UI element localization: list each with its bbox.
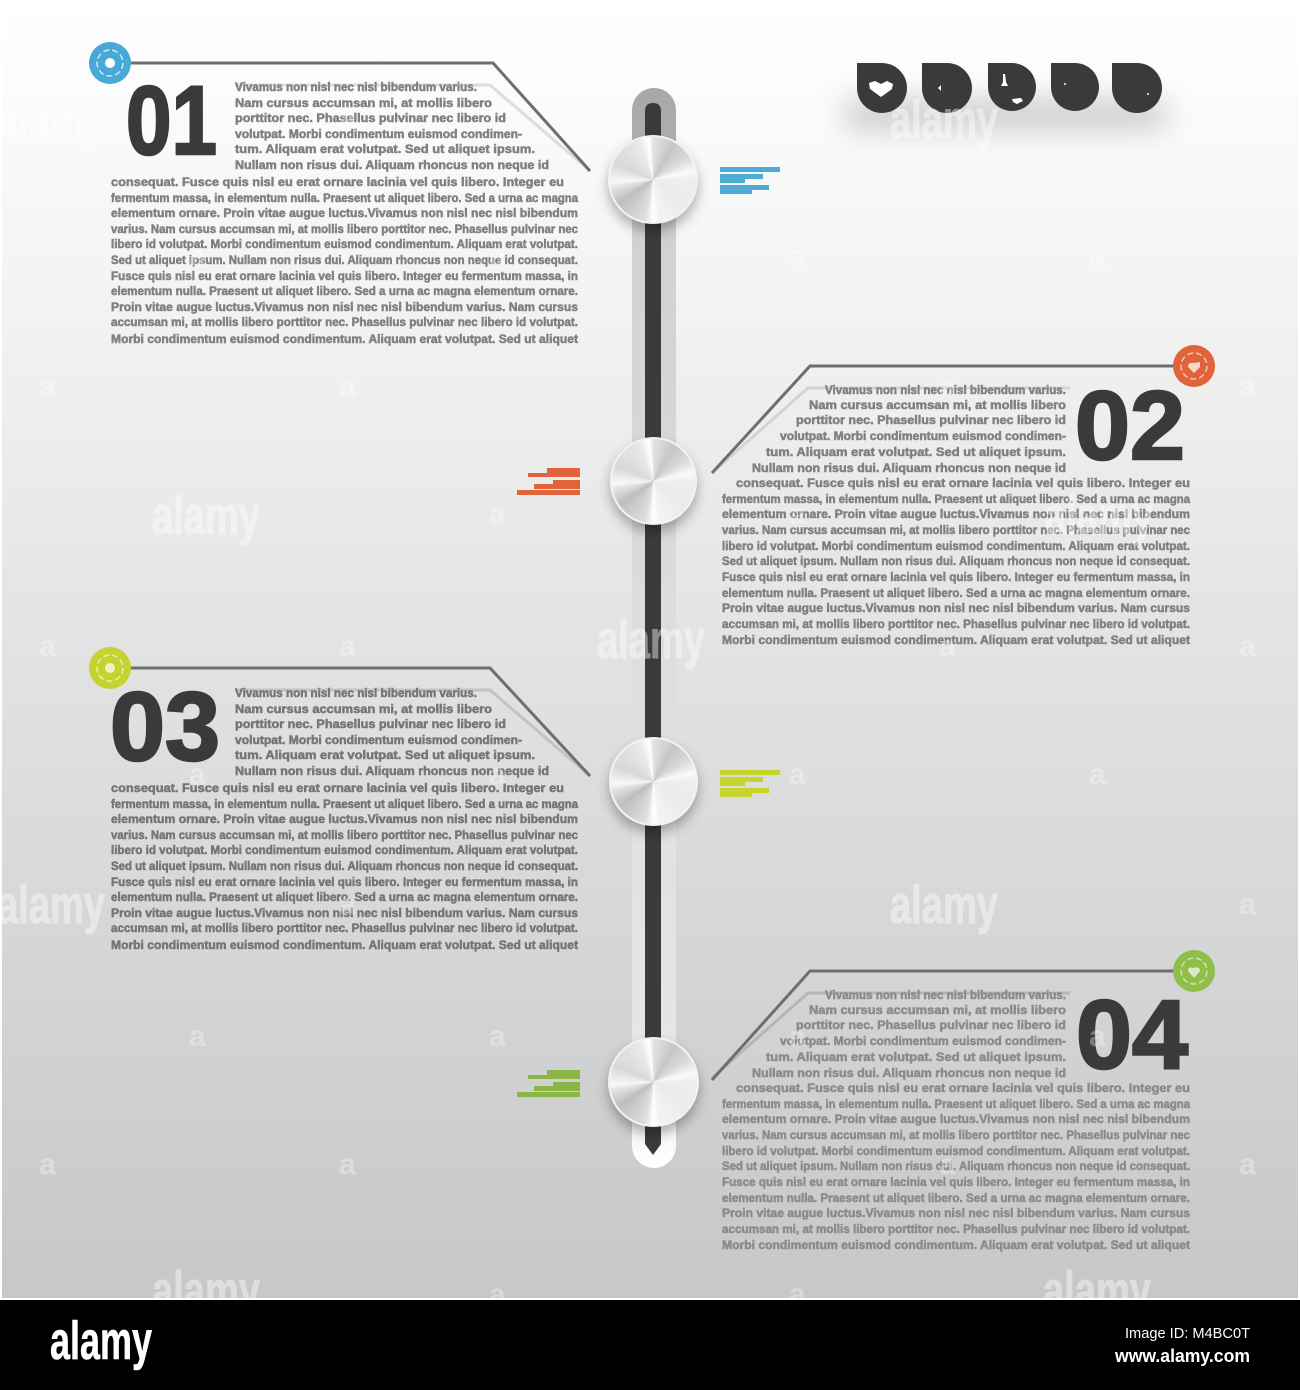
text block 04: tum. Aliquam erat volutpat. Sed ut aliquet ipsum. — [766, 1050, 1066, 1064]
knob 4 — [608, 1037, 699, 1127]
watermarks: a — [939, 370, 956, 403]
watermarks: a — [39, 630, 56, 663]
watermarks: a — [39, 1148, 56, 1181]
watermarks: a — [1239, 370, 1256, 403]
watermarks: a — [189, 240, 206, 273]
watermarks: alamy — [0, 875, 105, 935]
text block 04: elementum nulla. Praesent ut aliquet libero. Sed a urna ac magna elementum ornare. — [722, 1191, 1190, 1205]
text block 01: Sed ut aliquet ipsum. Nullam non risus dui. Aliquam rhoncus non neque id consequat. — [111, 253, 578, 267]
knob 1 — [608, 135, 698, 224]
timeline track — [632, 88, 676, 1168]
text block 01: Fusce quis nisl eu erat ornare lacinia vel quis libero. Integer eu fermentum massa, in — [111, 269, 578, 283]
text block 03: accumsan mi, at mollis libero porttitor nec. Phasellus pulvinar nec libero id volutpat. — [111, 921, 578, 935]
text block 04: Fusce quis nisl eu erat ornare lacinia vel quis libero. Integer eu fermentum massa, in — [722, 1175, 1190, 1189]
text block 03: elementum nulla. Praesent ut aliquet libero. Sed a urna ac magna elementum ornare. — [111, 890, 578, 904]
text block 03: consequat. Fusce quis nisl eu erat ornare lacinia vel quis libero. Integer eu — [111, 781, 564, 795]
text block 01: Morbi condimentum euismod condimentum. Aliquam erat volutpat. Sed ut aliquet — [111, 332, 578, 346]
text block 01: consequat. Fusce quis nisl eu erat ornare lacinia vel quis libero. Integer eu — [111, 175, 564, 189]
watermarks: alamy — [0, 90, 105, 150]
text block 03: fermentum massa, in elementum nulla. Praesent ut aliquet libero. Sed a urna ac magna — [111, 797, 578, 811]
icon row — [845, 63, 1165, 128]
text block 02: libero id volutpat. Morbi condimentum euismod condimentum. Aliquam erat volutpat. — [722, 539, 1190, 553]
watermarks: a — [1239, 888, 1256, 921]
text block 03: Fusce quis nisl eu erat ornare lacinia vel quis libero. Integer eu fermentum massa, in — [111, 875, 578, 889]
watermarks: a — [789, 758, 806, 791]
text block 04: libero id volutpat. Morbi condimentum euismod condimentum. Aliquam erat volutpat. — [722, 1144, 1190, 1158]
text block 01: Proin vitae augue luctus.Vivamus non nisl nec nisl bibendum varius. Nam cursus — [111, 300, 578, 314]
text block 01: fermentum massa, in elementum nulla. Praesent ut aliquet libero. Sed a urna ac magna — [111, 191, 578, 205]
watermarks: alamy — [890, 90, 998, 150]
text block 01: Nullam non risus dui. Aliquam rhoncus non neque id — [235, 158, 549, 172]
icon: heart badge — [857, 63, 907, 113]
connector lines 01 — [130, 63, 590, 171]
text block 02: Fusce quis nisl eu erat ornare lacinia vel quis libero. Integer eu fermentum massa, in — [722, 570, 1190, 584]
footer logo: alamy — [50, 1311, 152, 1371]
text block 02: elementum nulla. Praesent ut aliquet libero. Sed a urna ac magna elementum ornare. — [722, 586, 1190, 600]
icon: badge 4 — [1051, 63, 1099, 111]
text block 01: accumsan mi, at mollis libero porttitor nec. Phasellus pulvinar nec libero id volutpat. — [111, 315, 578, 329]
text block 04: Nam cursus accumsan mi, at mollis libero — [809, 1003, 1066, 1017]
website: www.alamy.com — [1114, 1346, 1250, 1366]
watermarks: alamy — [1045, 486, 1153, 546]
text block 03: elementum ornare. Proin vitae augue luctus.Vivamus non nisl nec nisl bibendum — [111, 812, 578, 826]
text block 04: volutpat. Morbi condimentum euismod condimen- — [780, 1034, 1066, 1048]
watermarks: a — [339, 1148, 356, 1181]
text block 04: Proin vitae augue luctus.Vivamus non nisl nec nisl bibendum varius. Nam cursus — [722, 1206, 1190, 1220]
text block 04: Nullam non risus dui. Aliquam rhoncus non neque id — [752, 1066, 1066, 1080]
text block 02: accumsan mi, at mollis libero porttitor nec. Phasellus pulvinar nec libero id volutpat. — [722, 617, 1190, 631]
text block 01: Nam cursus accumsan mi, at mollis libero — [235, 96, 492, 110]
panel: step 04 — [517, 950, 1215, 1252]
watermarks: a — [789, 498, 806, 531]
bars: blue — [720, 167, 780, 194]
number 04: 04 — [1076, 980, 1188, 1089]
text block 04: Sed ut aliquet ipsum. Nullam non risus dui. Aliquam rhoncus non neque id consequat. — [722, 1159, 1190, 1173]
text block 03: volutpat. Morbi condimentum euismod condimen- — [235, 733, 522, 747]
text block 02: fermentum massa, in elementum nulla. Praesent ut aliquet libero. Sed a urna ac magna — [722, 492, 1190, 506]
watermarks: a — [339, 630, 356, 663]
watermarks: alamy — [152, 486, 260, 546]
watermarks: a — [189, 1020, 206, 1053]
text block 03: Proin vitae augue luctus.Vivamus non nisl nec nisl bibendum varius. Nam cursus — [111, 906, 578, 920]
watermarks: a — [789, 240, 806, 273]
text block 03: libero id volutpat. Morbi condimentum euismod condimentum. Aliquam erat volutpat. — [111, 843, 578, 857]
number 02: 02 — [1075, 371, 1185, 480]
text block 01: porttitor nec. Phasellus pulvinar nec libero id — [235, 111, 506, 125]
text block 03: Morbi condimentum euismod condimentum. Aliquam erat volutpat. Sed ut aliquet — [111, 938, 578, 952]
text block 02: Nullam non risus dui. Aliquam rhoncus non neque id — [752, 461, 1066, 475]
bars: orange — [517, 468, 580, 495]
text block 04: consequat. Fusce quis nisl eu erat ornare lacinia vel quis libero. Integer eu — [736, 1081, 1190, 1095]
icon: badge 3 — [988, 63, 1036, 111]
watermarks: a — [1239, 1148, 1256, 1181]
icon: blue marker — [89, 42, 131, 84]
watermarks: a — [339, 102, 356, 135]
text block 01: elementum ornare. Proin vitae augue luctus.Vivamus non nisl nec nisl bibendum — [111, 206, 578, 220]
panel: step 01 — [89, 42, 780, 346]
watermarks: alamy — [597, 610, 705, 670]
watermarks: a — [789, 1020, 806, 1053]
text block 01 — [111, 80, 578, 346]
text block 03: tum. Aliquam erat volutpat. Sed ut aliquet ipsum. — [235, 748, 535, 762]
icon: yellow marker — [89, 647, 131, 689]
watermarks: a — [489, 758, 506, 791]
text block 02: varius. Nam cursus accumsan mi, at mollis libero porttitor nec. Phasellus pulvinar nec — [722, 523, 1190, 537]
text block 03: Vivamus non nisl nec nisl bibendum varius. — [235, 686, 477, 700]
text block 02 — [722, 383, 1190, 647]
watermarks: a — [489, 498, 506, 531]
connector lines 03 — [130, 668, 590, 776]
text block 04: fermentum massa, in elementum nulla. Praesent ut aliquet libero. Sed a urna ac magna — [722, 1097, 1190, 1111]
text block 01: tum. Aliquam erat volutpat. Sed ut aliquet ipsum. — [235, 142, 535, 156]
text block 02: Nam cursus accumsan mi, at mollis libero — [809, 398, 1066, 412]
watermarks: a — [39, 370, 56, 403]
watermarks: a — [939, 630, 956, 663]
watermarks: a — [189, 758, 206, 791]
text block 02: Morbi condimentum euismod condimentum. Aliquam erat volutpat. Sed ut aliquet — [722, 633, 1190, 647]
text block 04: varius. Nam cursus accumsan mi, at mollis libero porttitor nec. Phasellus pulvinar nec — [722, 1128, 1190, 1142]
watermarks: alamy — [890, 875, 998, 935]
watermarks: a — [939, 1148, 956, 1181]
icon: green marker — [1173, 950, 1215, 992]
text block 02: elementum ornare. Proin vitae augue luctus.Vivamus non nisl nec nisl bibendum — [722, 507, 1190, 521]
watermarks: a — [1089, 758, 1106, 791]
text block 02: Vivamus non nisl nec nisl bibendum varius. — [825, 383, 1066, 397]
text block 04: accumsan mi, at mollis libero porttitor nec. Phasellus pulvinar nec libero id volutpat. — [722, 1222, 1190, 1236]
watermarks: a — [1239, 630, 1256, 663]
text block 01: varius. Nam cursus accumsan mi, at mollis libero porttitor nec. Phasellus pulvinar nec — [111, 222, 578, 236]
number 01: 01 — [126, 66, 217, 175]
knob 2 — [610, 437, 697, 525]
text block 03: Sed ut aliquet ipsum. Nullam non risus dui. Aliquam rhoncus non neque id consequat. — [111, 859, 578, 873]
text block 02: tum. Aliquam erat volutpat. Sed ut aliquet ipsum. — [766, 445, 1066, 459]
text block 02: consequat. Fusce quis nisl eu erat ornare lacinia vel quis libero. Integer eu — [736, 476, 1190, 490]
watermarks: a — [339, 370, 356, 403]
footer — [0, 1300, 1300, 1390]
text block 04: porttitor nec. Phasellus pulvinar nec libero id — [796, 1018, 1066, 1032]
icon: badge 5 — [1112, 63, 1162, 113]
text block 01: volutpat. Morbi condimentum euismod condimen- — [235, 127, 522, 141]
text block 03: porttitor nec. Phasellus pulvinar nec libero id — [235, 717, 506, 731]
watermarks: a — [489, 240, 506, 273]
watermarks: a — [339, 888, 356, 921]
knob 3 — [609, 737, 698, 826]
text block 03: Nam cursus accumsan mi, at mollis libero — [235, 702, 492, 716]
icon: badge 2 — [922, 63, 972, 113]
watermarks: a — [489, 1020, 506, 1053]
text block 02: porttitor nec. Phasellus pulvinar nec libero id — [796, 413, 1066, 427]
watermarks: a — [1089, 1020, 1106, 1053]
watermarks: a — [1089, 240, 1106, 273]
text block 02: volutpat. Morbi condimentum euismod condimen- — [780, 429, 1066, 443]
panel: step 03 — [89, 647, 780, 952]
text block 01: libero id volutpat. Morbi condimentum euismod condimentum. Aliquam erat volutpat. — [111, 237, 578, 251]
text block 02: Proin vitae augue luctus.Vivamus non nisl nec nisl bibendum varius. Nam cursus — [722, 601, 1190, 615]
image id: Image ID: M4BC0T — [1125, 1325, 1250, 1342]
text block 03: varius. Nam cursus accumsan mi, at mollis libero porttitor nec. Phasellus pulvinar nec — [111, 828, 578, 842]
bars: green — [517, 1070, 580, 1097]
connector lines 02 — [712, 366, 1175, 473]
bars: yellow — [720, 770, 780, 797]
icon: orange marker — [1173, 345, 1215, 387]
text block 04: elementum ornare. Proin vitae augue luctus.Vivamus non nisl nec nisl bibendum — [722, 1112, 1190, 1126]
text block 02: Sed ut aliquet ipsum. Nullam non risus dui. Aliquam rhoncus non neque id consequat. — [722, 554, 1190, 568]
text block 03: Nullam non risus dui. Aliquam rhoncus non neque id — [235, 764, 549, 778]
text block 04 — [722, 988, 1190, 1252]
text block 01: elementum nulla. Praesent ut aliquet libero. Sed a urna ac magna elementum ornare. — [111, 284, 578, 298]
panel: step 02 — [517, 345, 1215, 647]
text block 04: Morbi condimentum euismod condimentum. Aliquam erat volutpat. Sed ut aliquet — [722, 1238, 1190, 1252]
text block 03 — [111, 686, 578, 952]
text block 04: Vivamus non nisl nec nisl bibendum varius. — [825, 988, 1066, 1002]
text block 01: Vivamus non nisl nec nisl bibendum varius. — [235, 80, 477, 94]
connector lines 04 — [712, 971, 1175, 1080]
watermarks: a — [1239, 102, 1256, 135]
number 03: 03 — [110, 672, 220, 781]
